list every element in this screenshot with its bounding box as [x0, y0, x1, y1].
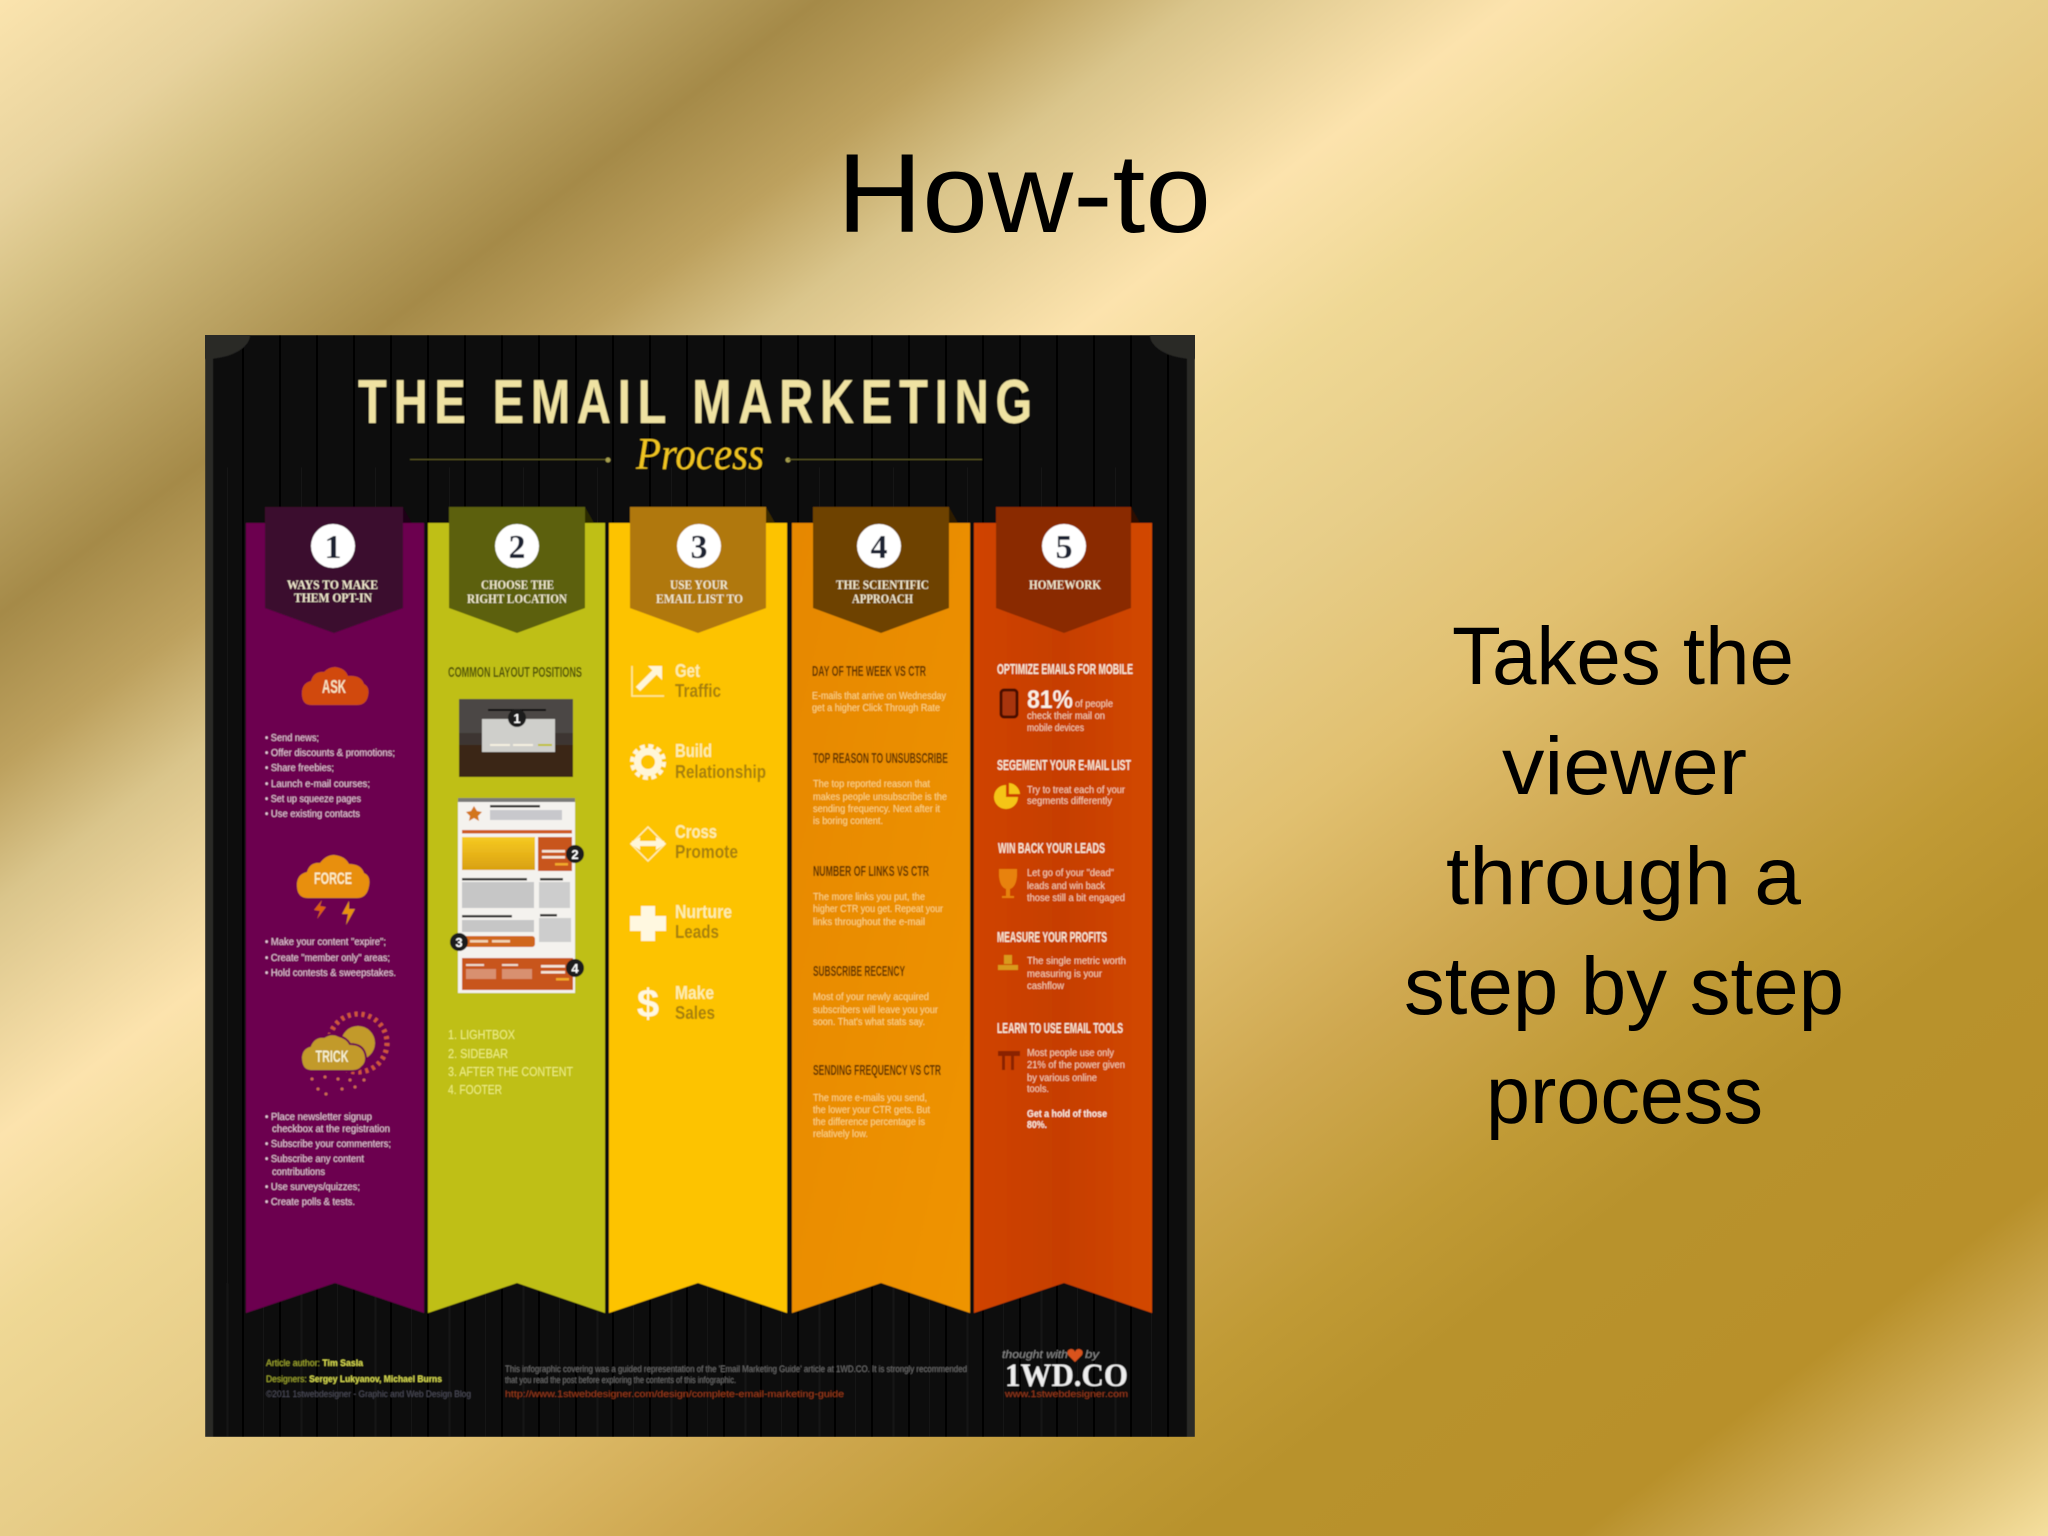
banner 1: 1: [324, 529, 342, 566]
icon: trick cloud with sun: TRICK: [316, 1047, 349, 1066]
banner 4: THE SCIENTIFIC: [836, 578, 929, 592]
section: segment your e-mail list: Try to treat each of your: [1027, 784, 1125, 796]
label: make sales: [675, 983, 715, 1023]
icon: gear, build relationship: [632, 746, 664, 778]
list: trick items: checkbox at the registration: [272, 1123, 390, 1135]
label: make sales: Sales: [675, 1003, 715, 1023]
banner 3: EMAIL LIST TO: [656, 592, 743, 606]
infographic subheading: process: Process: [635, 428, 764, 479]
list: force items: • Hold contests & sweepstakes.: [265, 967, 396, 979]
section: win back your leads: WIN BACK YOUR LEADS: [998, 840, 1105, 857]
banner 2: 2: [508, 529, 526, 566]
banner 5: [996, 507, 1131, 633]
list: layout positions: 2. SIDEBAR: [448, 1046, 508, 1061]
label: get traffic: Get: [675, 661, 700, 681]
section: sending frequency vs ctr: [813, 1062, 941, 1140]
list: trick items: • Place newsletter signup: [265, 1111, 372, 1123]
footer: note and link: that you read the post before exploring the contents of this infographic.: [505, 1375, 736, 1385]
diagram: page layout: [450, 798, 584, 993]
section: segment your e-mail list: [994, 757, 1131, 809]
label: nurture leads: [675, 902, 732, 942]
section: top reason to unsubscribe: makes people unsubscribe is the: [813, 791, 947, 803]
diagram: page layout: 4: [571, 961, 579, 976]
section: sending frequency vs ctr: relatively low.: [813, 1128, 868, 1140]
infographic heading: the email marketing: THE EMAIL MARKETING: [358, 367, 1032, 437]
banner 1: [265, 507, 403, 633]
section: optimize emails for mobile: check their mail on: [1027, 710, 1105, 722]
label: nurture leads: Nurture: [675, 902, 732, 922]
list: trick items: contributions: [272, 1166, 325, 1178]
section: top reason to unsubscribe: TOP REASON TO UNSUBSCRIBE: [813, 750, 948, 767]
section: measure your profits: [997, 929, 1126, 992]
list: layout positions: [448, 1027, 573, 1097]
list: force items: • Make your content "expire";: [265, 936, 386, 948]
section: number of links vs ctr: links throughout the e-mail: [813, 916, 925, 928]
diagram: page layout: 2: [571, 847, 579, 862]
section: learn to use email tools: Get a hold of those: [1027, 1108, 1107, 1120]
icon: ask cloud: [302, 667, 368, 705]
list: ask items: • Send news;: [265, 732, 319, 744]
icon: force cloud with lightning: [297, 855, 369, 925]
banner 2: [449, 507, 585, 633]
footer: note and link: [505, 1364, 967, 1399]
label: cross promote: [675, 822, 738, 862]
footer: 1WD.CO logo: [1002, 1349, 1128, 1400]
label: get traffic: Traffic: [675, 681, 721, 701]
list: trick items: [265, 1111, 391, 1208]
footer: note and link: This infographic covering was a guided representation of the 'Email Marketing Guide' article at 1WD.CO. It is strongly recommended: [505, 1364, 967, 1374]
section: win back your leads: leads and win back: [1027, 880, 1106, 892]
footer: 1WD.CO logo: thought with: [1002, 1349, 1068, 1361]
section: learn to use email tools: Most people use only: [1027, 1047, 1115, 1059]
label: get traffic: [675, 661, 721, 701]
list: ask items: • Share freebies;: [265, 762, 334, 774]
icon: force cloud with lightning: FORCE: [314, 869, 352, 888]
banner 4: 4: [870, 529, 888, 566]
icon: arrow, get traffic: [632, 666, 664, 696]
list: layout positions: 4. FOOTER: [448, 1082, 502, 1097]
list: ask items: • Use existing contacts: [265, 808, 360, 820]
section: optimize emails for mobile: OPTIMIZE EMAILS FOR MOBILE: [997, 661, 1133, 678]
list: trick items: • Subscribe your commenters;: [265, 1138, 391, 1150]
section: sending frequency vs ctr: the difference percentage is: [813, 1116, 925, 1128]
section: day of the week vs ctr: get a higher Click Through Rate: [812, 702, 940, 714]
section: sending frequency vs ctr: The more e-mails you send,: [813, 1092, 927, 1104]
banner 3: 3: [690, 529, 708, 566]
section: measure your profits: measuring is your: [1027, 968, 1102, 980]
list: force items: [265, 936, 396, 979]
panel: column 3, use your email list to: [609, 507, 787, 1313]
section: learn to use email tools: 21% of the power given: [1027, 1059, 1125, 1071]
icon: diamond arrows, cross promote: [630, 827, 666, 861]
section: day of the week vs ctr: DAY OF THE WEEK VS CTR: [812, 663, 926, 680]
icon: plus, nurture leads: [630, 906, 666, 941]
banner 4: APPROACH: [852, 592, 913, 606]
section: number of links vs ctr: [813, 863, 943, 928]
panel: email marketing process infographic: [205, 335, 1195, 1437]
icon: ask cloud: ASK: [322, 677, 346, 697]
footer: 1WD.CO logo: www.1stwebdesigner.com: [1004, 1389, 1128, 1400]
icon: trick cloud with sun: [301, 1014, 387, 1096]
section: win back your leads: Let go of your "dead": [1027, 867, 1114, 879]
text block: takes the viewer through a step by step process: step by step: [1404, 941, 1844, 1032]
list: ask items: [265, 732, 395, 820]
list: trick items: • Use surveys/quizzes;: [265, 1181, 360, 1193]
footer: credits: Article author: Tim Sasla: [266, 1358, 364, 1368]
section: sending frequency vs ctr: the lower your CTR gets. But: [813, 1104, 930, 1116]
footer: note and link: http://www.1stwebdesigner.com/design/complete-email-marketing-guide: [505, 1389, 844, 1399]
footer: credits: ©2011 1stwebdesigner - Graphic and Web Design Blog: [266, 1389, 471, 1399]
section: day of the week vs ctr: [812, 663, 947, 714]
section: top reason to unsubscribe: The top reported reason that: [813, 778, 930, 790]
panel: column 2, choose the right location: [428, 507, 605, 1313]
label: build relationship: Build: [675, 741, 712, 761]
icon: dollar, make sales: $: [637, 982, 659, 1026]
section: subscribe recency: soon. That's what stats say.: [813, 1016, 925, 1028]
diagram: page layout: 3: [455, 935, 463, 950]
text block: takes the viewer through a step by step process: through a: [1446, 831, 1801, 922]
section: number of links vs ctr: NUMBER OF LINKS VS CTR: [813, 863, 929, 880]
label: build relationship: [675, 741, 766, 782]
text block: takes the viewer through a step by step process: viewer: [1502, 721, 1747, 812]
banner 3: [630, 507, 766, 633]
label: cross promote: Promote: [675, 842, 738, 862]
label: nurture leads: Leads: [675, 922, 719, 942]
footer: 1WD.CO logo: by: [1085, 1349, 1101, 1361]
list: ask items: • Set up squeeze pages: [265, 793, 361, 805]
section: learn to use email tools: LEARN TO USE EMAIL TOOLS: [997, 1020, 1123, 1037]
list: layout positions: 1. LIGHTBOX: [448, 1027, 515, 1042]
footer: credits: [266, 1358, 471, 1399]
banner 2: RIGHT LOCATION: [467, 592, 567, 606]
banner 5: 5: [1056, 529, 1072, 566]
text block: takes the viewer through a step by step process: [1404, 611, 1844, 1141]
infographic subheading: process: [409, 438, 983, 470]
section: win back your leads: those still a bit engaged: [1027, 892, 1125, 904]
section: subscribe recency: subscribers will leave you your: [813, 1004, 938, 1016]
list: layout positions: 3. AFTER THE CONTENT: [448, 1064, 573, 1079]
text block: takes the viewer through a step by step process: Takes the: [1452, 611, 1794, 702]
footer: credits: Designers: Sergey Lukyanov, Michael Burns: [266, 1374, 442, 1384]
diagram: lightbox layout: [459, 699, 573, 777]
list: ask items: • Offer discounts & promotions;: [265, 747, 395, 759]
section: segment your e-mail list: segments differently: [1027, 795, 1113, 807]
label: build relationship: Relationship: [675, 762, 766, 782]
panel: column 5, homework: [974, 507, 1152, 1313]
section: optimize emails for mobile: 81%: [1027, 686, 1073, 714]
section: subscribe recency: [813, 963, 938, 1028]
section: top reason to unsubscribe: [813, 750, 948, 827]
section: measure your profits: The single metric worth: [1027, 955, 1126, 967]
banner 2: CHOOSE THE: [481, 578, 554, 592]
section: number of links vs ctr: higher CTR you get. Repeat your: [813, 903, 943, 915]
section: day of the week vs ctr: E-mails that arrive on Wednesday: [812, 690, 947, 702]
section: top reason to unsubscribe: sending frequency. Next after it: [813, 803, 940, 815]
section: top reason to unsubscribe: is boring content.: [813, 815, 883, 827]
label: cross promote: Cross: [675, 822, 717, 842]
heading: common layout positions: COMMON LAYOUT POSITIONS: [448, 664, 582, 681]
panel: column 1, ways to make them opt-in: [246, 507, 424, 1313]
section: optimize emails for mobile: of people: [1075, 698, 1113, 710]
section: optimize emails for mobile: mobile devices: [1027, 722, 1084, 734]
section: measure your profits: cashflow: [1027, 980, 1064, 992]
list: force items: • Create "member only" areas;: [265, 952, 390, 964]
section: win back your leads: [998, 840, 1125, 904]
banner 4: [813, 507, 949, 633]
section: subscribe recency: Most of your newly acquired: [813, 991, 929, 1003]
section: learn to use email tools: [997, 1020, 1125, 1131]
list: trick items: • Subscribe any content: [265, 1153, 364, 1165]
diagram: lightbox layout: 1: [513, 711, 521, 726]
footer: 1WD.CO logo: 1WD.CO: [1005, 1358, 1128, 1394]
panel: column 4, the scientific approach: [792, 507, 970, 1313]
label: make sales: Make: [675, 983, 714, 1003]
section: number of links vs ctr: The more links you put, the: [813, 891, 925, 903]
section: learn to use email tools: by various online: [1027, 1072, 1097, 1084]
list: ask items: • Launch e-mail courses;: [265, 778, 370, 790]
list: trick items: • Create polls & tests.: [265, 1196, 355, 1208]
section: learn to use email tools: tools.: [1027, 1083, 1049, 1095]
banner 1: WAYS TO MAKE: [287, 578, 378, 592]
banner 1: THEM OPT-IN: [294, 591, 372, 605]
section: segment your e-mail list: SEGEMENT YOUR E-MAIL LIST: [997, 757, 1131, 774]
text block: takes the viewer through a step by step process: process: [1486, 1050, 1763, 1141]
section: optimize emails for mobile: [997, 661, 1133, 734]
title: How-to: How-to: [837, 131, 1211, 256]
section: subscribe recency: SUBSCRIBE RECENCY: [813, 963, 905, 980]
section: sending frequency vs ctr: SENDING FREQUENCY VS CTR: [813, 1062, 941, 1079]
banner 3: USE YOUR: [670, 578, 729, 592]
section: measure your profits: MEASURE YOUR PROFITS: [997, 929, 1107, 946]
section: learn to use email tools: 80%.: [1027, 1119, 1047, 1131]
banner 5: HOMEWORK: [1029, 578, 1101, 592]
